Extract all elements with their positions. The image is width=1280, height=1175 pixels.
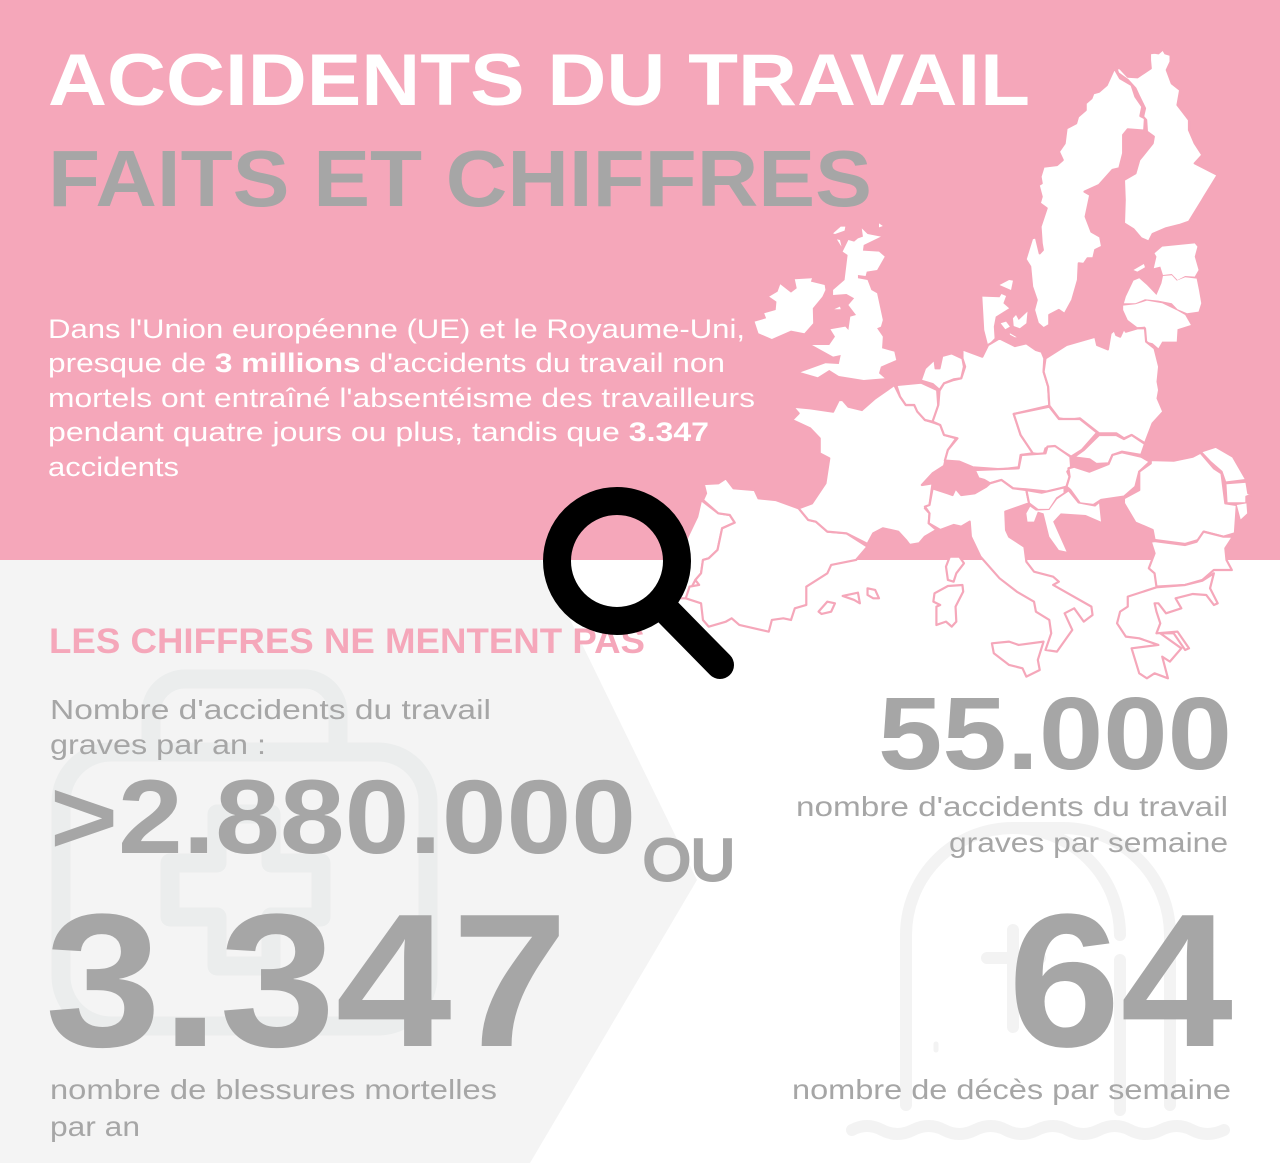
text block: introduction: pendant quatre jours ou plus, tandis que 3.347	[48, 417, 709, 447]
text block: introduction: Dans l'Union européenne (UE) et le Royaume-Uni,	[48, 314, 745, 344]
stat label: deaths per week: nombre de décès par semaine	[792, 1074, 1231, 1105]
connector word: ou: OU	[643, 828, 735, 893]
map: European Union and United Kingdom	[674, 49, 1254, 678]
stat number: serious accidents per week: 55.000	[878, 676, 1232, 791]
stat number: deaths per week: 64	[1008, 875, 1233, 1087]
text block: introduction: mortels ont entraîné l'absentéisme des travailleurs	[48, 383, 755, 413]
stat label: fatal injuries per year: nombre de blessures mortelles	[50, 1074, 497, 1105]
text block: introduction: accidents	[48, 452, 179, 482]
stat label: fatal injuries per year	[50, 1074, 497, 1142]
stat label: serious accidents per week: graves par semaine	[949, 827, 1228, 858]
panel: pink header band	[0, 0, 1280, 560]
stat label: serious accidents per week	[796, 791, 1228, 858]
stat label: fatal injuries per year: par an	[50, 1111, 140, 1142]
icon: first aid case watermark	[61, 679, 428, 1026]
stat number: fatal injuries per year: 3.347	[45, 875, 568, 1087]
panel: grey arrow-shaped statistics panel	[0, 560, 697, 1163]
stat number: serious accidents per year: >2.880.000	[50, 759, 636, 876]
heading: figures section: LES CHIFFRES NE MENTENT PAS	[49, 622, 645, 661]
subtitle: FAITS ET CHIFFRES	[48, 134, 872, 223]
stat label: serious accidents per year: graves par an :	[50, 729, 266, 760]
text block: introduction: presque de 3 millions d'accidents du travail non	[48, 348, 725, 378]
stat label: serious accidents per year: Nombre d'accidents du travail	[50, 694, 491, 725]
stat label: serious accidents per year	[50, 694, 491, 760]
stat label: serious accidents per week: nombre d'accidents du travail	[796, 791, 1228, 822]
icon: magnifying glass	[557, 501, 720, 665]
text block: introduction	[48, 314, 755, 482]
icon: tombstone watermark	[852, 828, 1224, 1134]
title: ACCIDENTS DU TRAVAIL	[48, 40, 1030, 121]
